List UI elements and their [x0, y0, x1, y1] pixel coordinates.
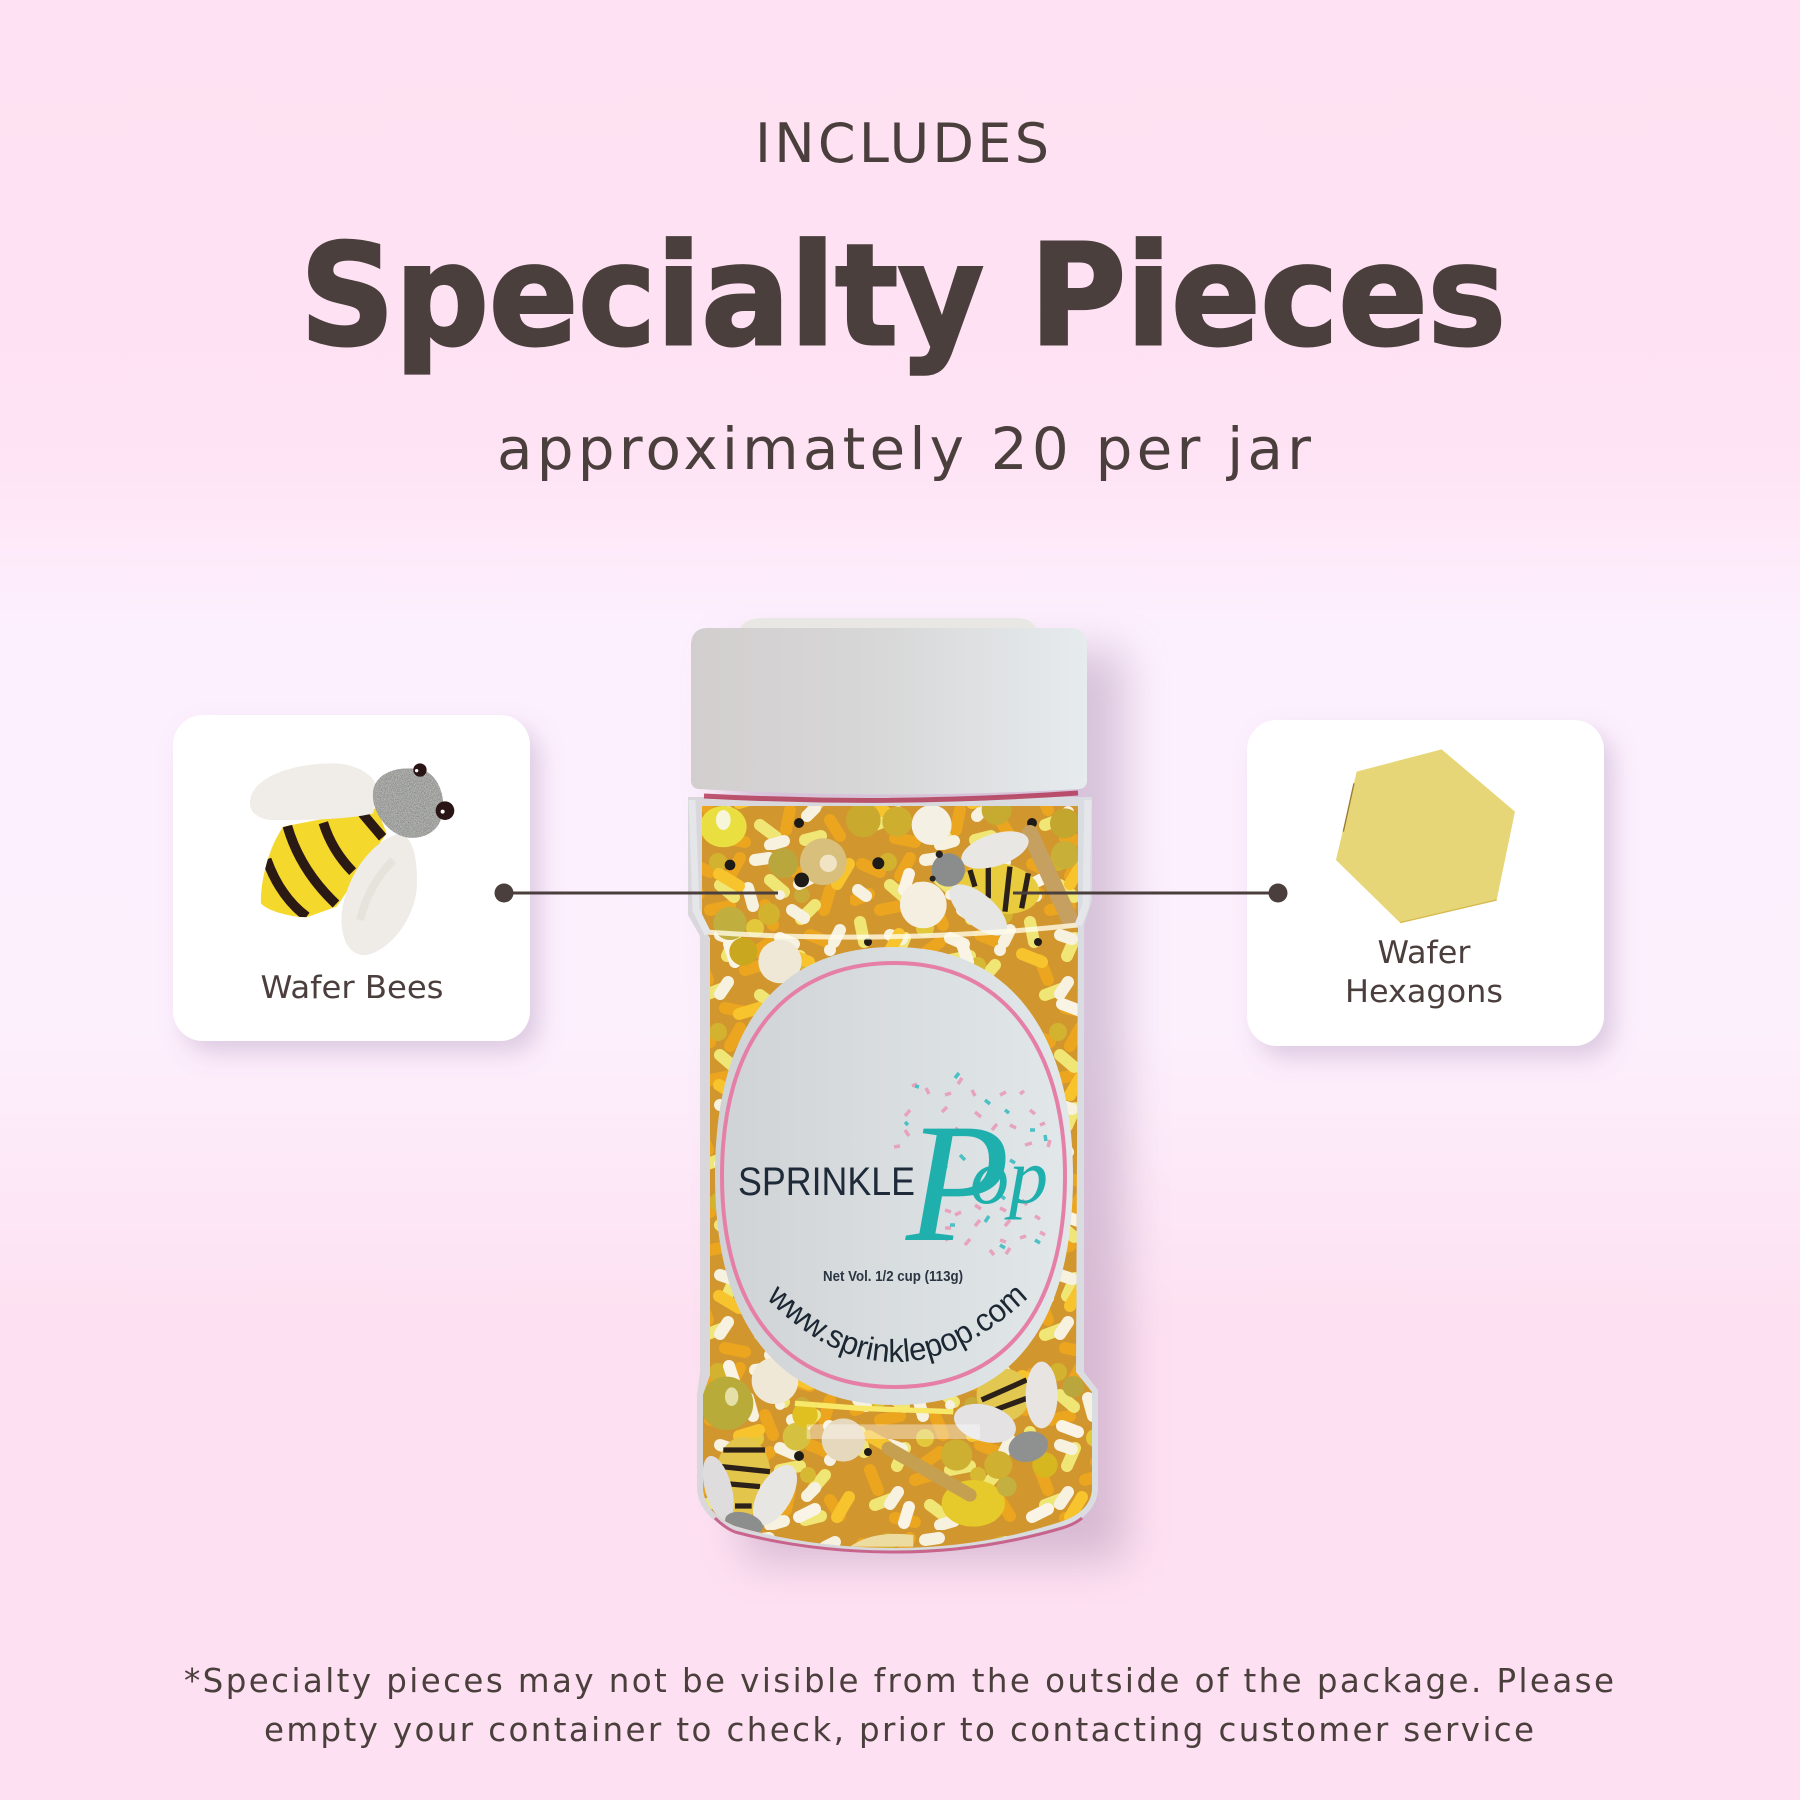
label: wafer hexagons: Wafer	[1378, 935, 1471, 971]
card background	[1247, 720, 1604, 1046]
card: wafer bees	[173, 715, 530, 1041]
website	[766, 1294, 1032, 1362]
top glare	[705, 925, 1078, 937]
red seal line	[704, 793, 1078, 800]
bee in jar bottom right	[950, 1362, 1058, 1466]
label: www.sprinklepop.com	[769, 1286, 1028, 1364]
footnote: empty your container to check, prior to contacting customer service	[264, 1711, 1534, 1749]
footnote: *Specialty pieces may not be visible from the outside of the package. Please	[184, 1662, 1614, 1700]
card background	[173, 715, 530, 1041]
jar side glass highlights	[692, 800, 1088, 934]
label: wafer bees: Wafer Bees	[260, 970, 444, 1006]
connector: left	[494, 884, 778, 902]
title: Specialty Pieces	[300, 215, 1506, 378]
specialty pieces bottom window	[697, 1357, 1084, 1547]
heading: includes: INCLUDES	[755, 112, 1049, 175]
confetti	[894, 1078, 1050, 1255]
bee in jar top	[930, 831, 1040, 936]
jar base rim	[715, 1518, 1082, 1552]
net volume: Net Vol. 1/2 cup (113g)	[823, 1269, 963, 1285]
logo: sprinkle: SPRINKLE	[738, 1160, 915, 1204]
subtitle: approximately 20 per jar	[497, 415, 1311, 483]
specialty pieces top window	[700, 795, 1080, 983]
logo: pop: P	[906, 1089, 1010, 1277]
icon: hexagon	[1336, 749, 1515, 923]
connector: right	[1013, 884, 1288, 902]
sprinkle fill	[695, 795, 1100, 1555]
jar body glass	[688, 797, 1098, 1552]
label	[715, 947, 1073, 1405]
label sticker	[715, 947, 1073, 1405]
card: wafer hexagons	[1247, 720, 1604, 1046]
cap	[691, 628, 1087, 794]
label pink ring	[722, 963, 1065, 1387]
label: wafer hexagons: Hexagons	[1345, 974, 1503, 1010]
jar shadow	[725, 650, 1125, 1560]
gold glare band	[795, 1403, 953, 1412]
bee in jar bottom left	[703, 1436, 798, 1532]
footnote	[184, 1662, 1614, 1749]
logo: pop: op	[970, 1133, 1048, 1220]
cap top nub	[740, 618, 1036, 628]
icon: bee	[250, 763, 454, 955]
jar	[688, 618, 1098, 1554]
